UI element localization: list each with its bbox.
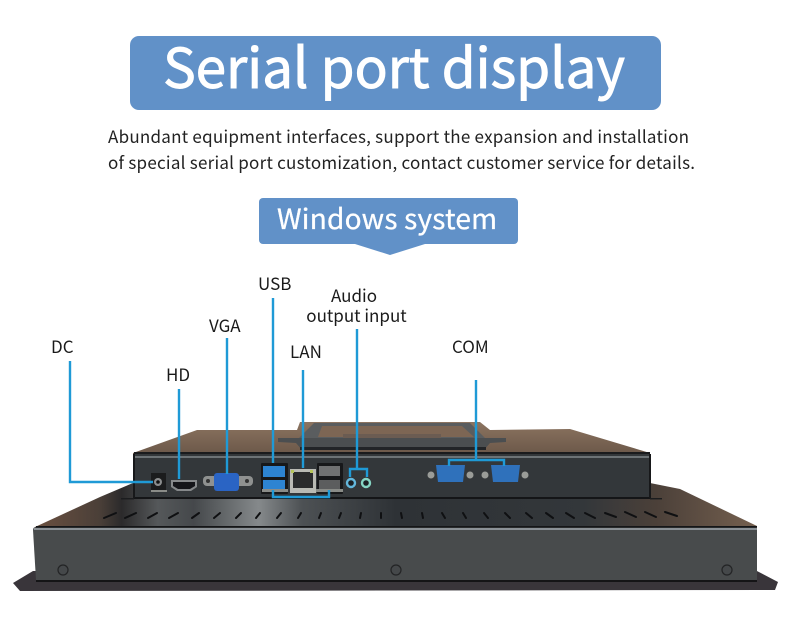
- port labels: Audio: [331, 282, 377, 307]
- line: USB: [273, 298, 329, 497]
- port: LAN: [290, 469, 316, 493]
- port: audio jacks: [347, 479, 370, 487]
- line: VGA: [226, 338, 228, 474]
- port labels: DC: [51, 333, 74, 358]
- line: Audio: [350, 329, 367, 477]
- port labels: LAN: [290, 338, 322, 363]
- port: USB 2: [316, 463, 343, 494]
- back plate: [35, 483, 757, 540]
- stand bracket: [278, 423, 506, 450]
- port: HD: [171, 480, 197, 491]
- title banner: Serial port display: [163, 24, 625, 104]
- io panel: [121, 452, 662, 499]
- port labels: output input: [306, 302, 407, 327]
- port labels: HD: [166, 361, 190, 386]
- line: HD: [178, 389, 180, 479]
- description text: Abundant equipment interfaces, support the expansion and installation: [108, 123, 689, 148]
- port: VGA: [203, 473, 253, 491]
- upper rear surface: [133, 422, 650, 470]
- port labels: [51, 270, 489, 386]
- line: DC: [70, 361, 153, 482]
- line: LAN: [302, 370, 304, 468]
- port: DC jack: [151, 473, 167, 492]
- description text: [108, 123, 695, 174]
- system banner: Windows system: [277, 198, 497, 238]
- description text: of special serial port customization, contact customer service for details.: [108, 149, 695, 174]
- port labels: USB: [258, 270, 291, 295]
- system banner: [259, 198, 518, 255]
- mounting flange: [13, 570, 778, 591]
- vent slots: [104, 512, 677, 518]
- port labels: COM: [452, 333, 489, 358]
- port: COM 2: [482, 465, 528, 482]
- front housing: [33, 526, 757, 582]
- port: USB 3: [261, 463, 288, 494]
- screws: [58, 565, 732, 575]
- monitor rear view: [13, 422, 778, 591]
- port labels: VGA: [209, 312, 241, 337]
- callout lines: [70, 298, 504, 497]
- port: COM 1: [428, 465, 474, 482]
- line: COM: [449, 380, 504, 466]
